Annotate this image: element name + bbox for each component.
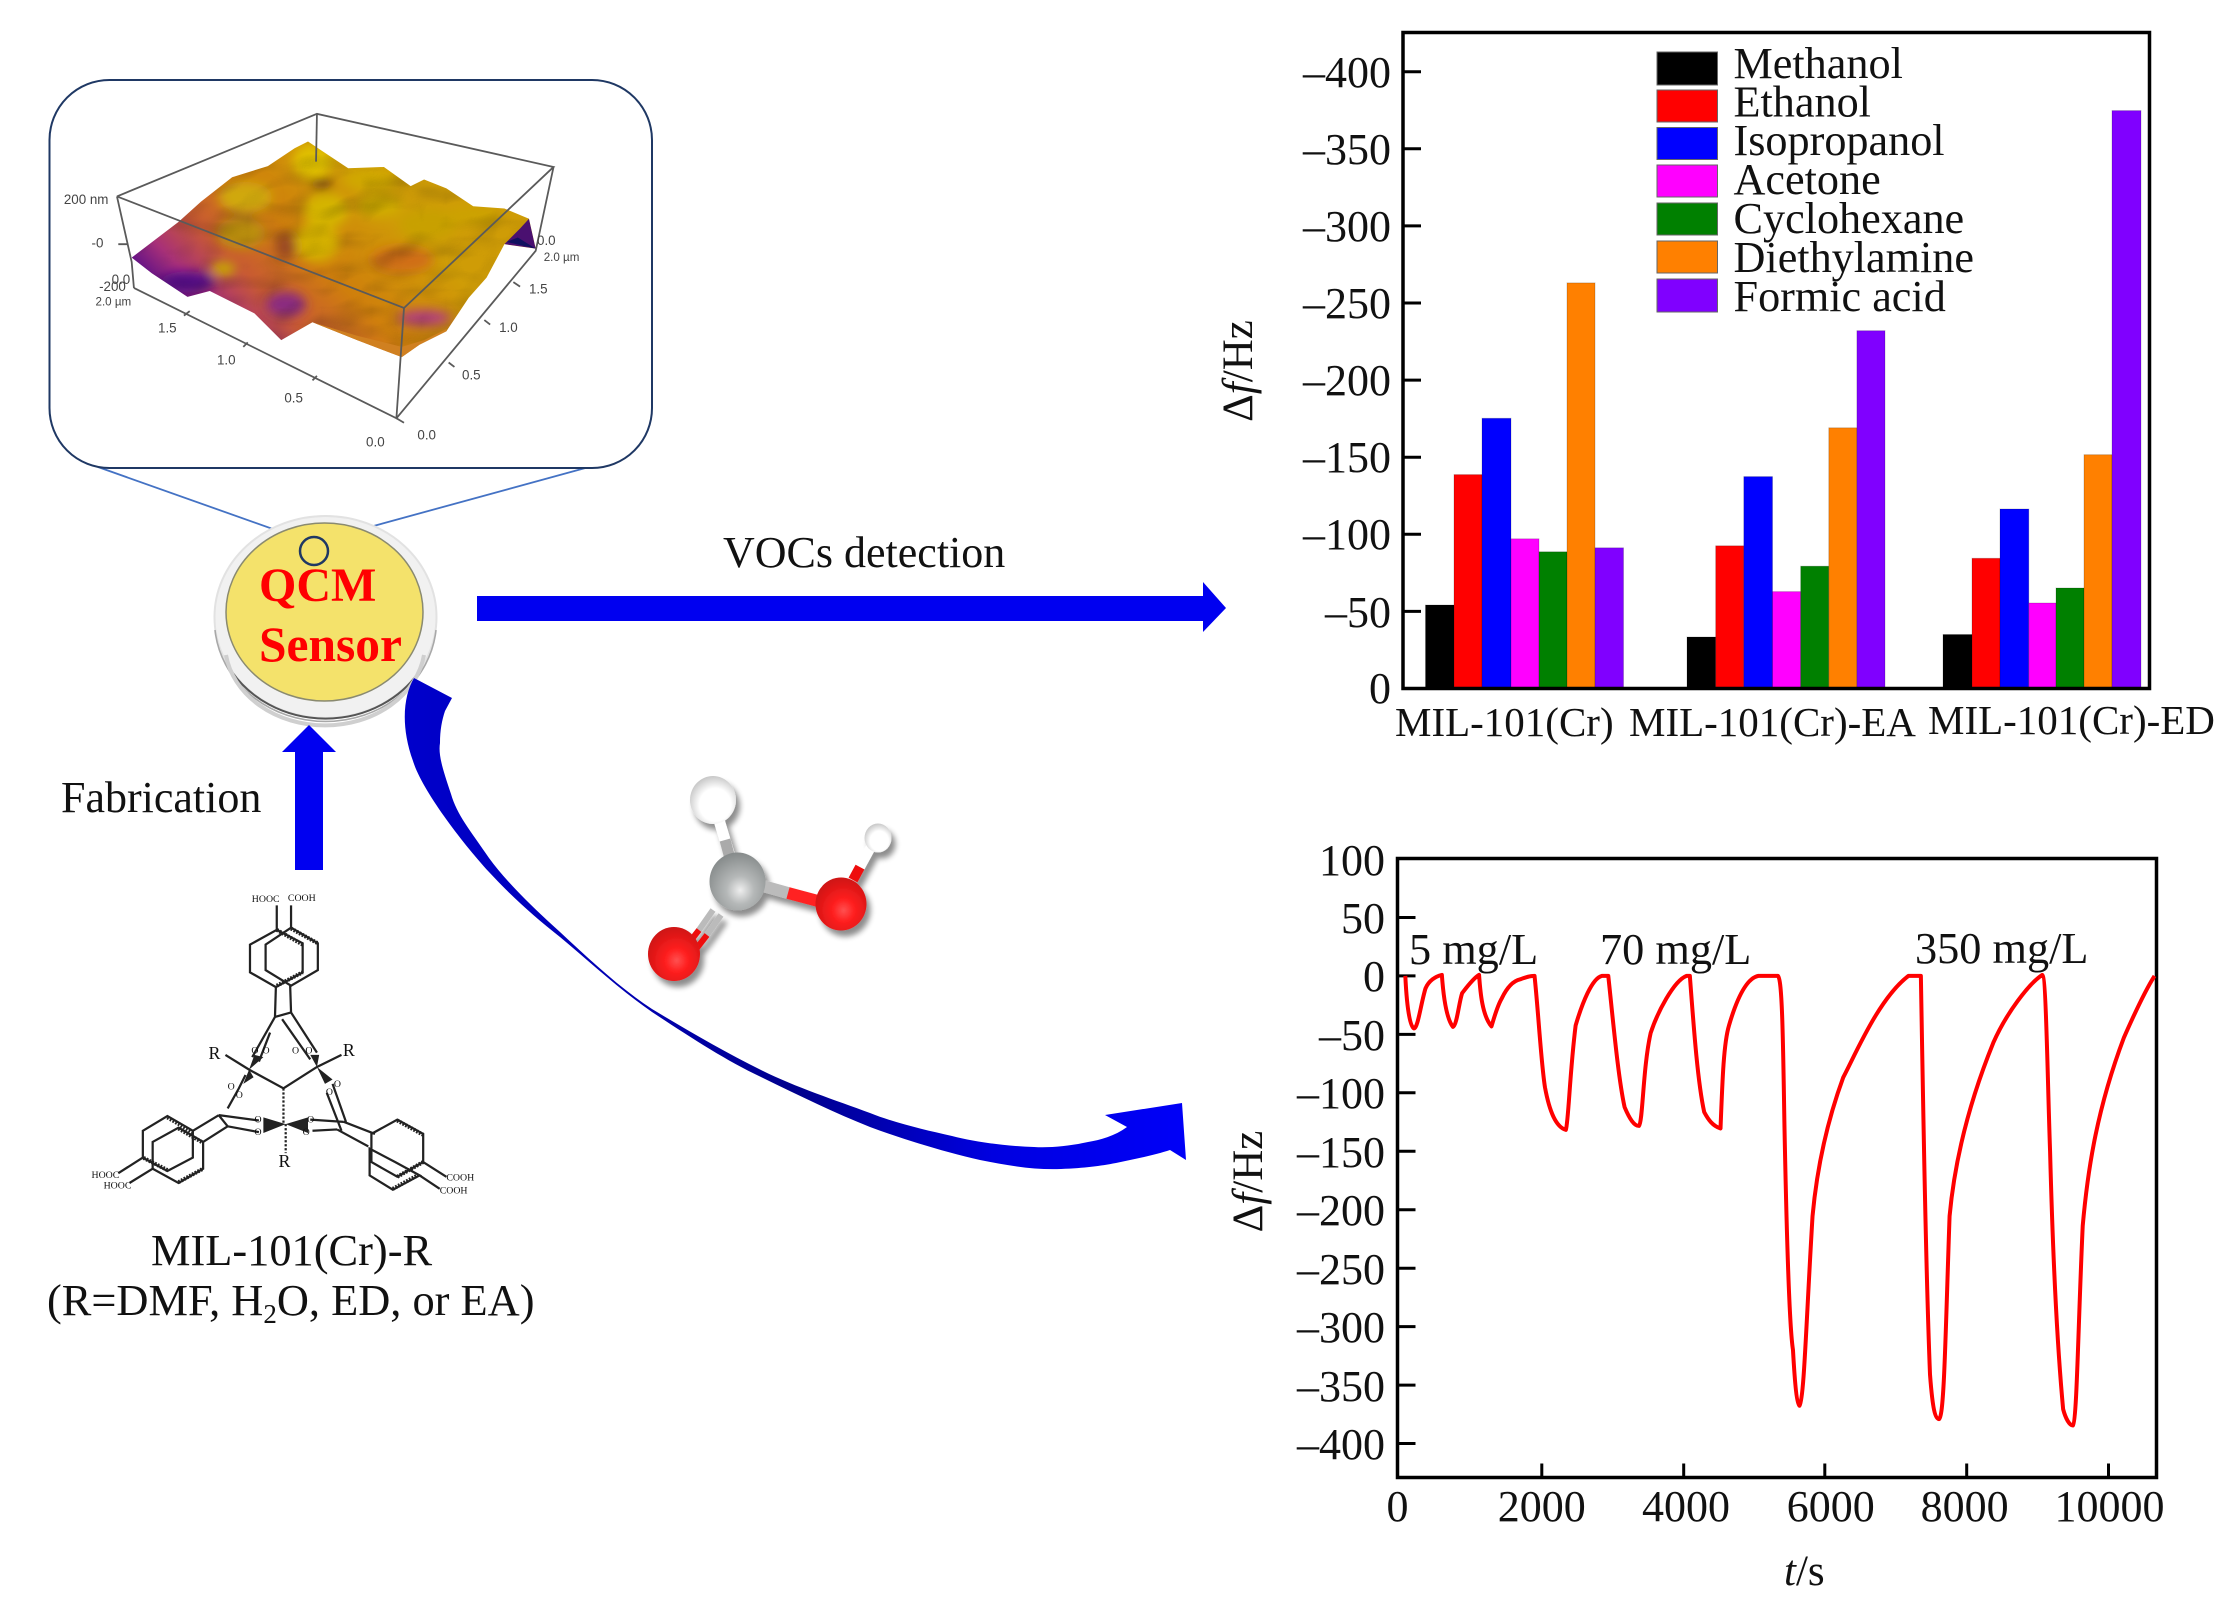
y axis tick labels: 100 xyxy=(1319,836,1385,885)
axis labels: -200 xyxy=(99,279,126,294)
x axis tick labels: 0 xyxy=(1386,1482,1408,1531)
arrow: VOCs detection xyxy=(477,582,1226,632)
x axis tick labels: 2000 xyxy=(1498,1482,1586,1531)
y axis tick labels: –50 xyxy=(1318,1011,1385,1060)
callout connector lines xyxy=(98,467,589,539)
chart: response curve over time xyxy=(1225,836,2164,1595)
AFM 3D surface plot xyxy=(64,114,579,449)
small oxygen and terminal labels: O xyxy=(292,1046,299,1057)
label: MIL-101(Cr)-R: (R=DMF, H xyxy=(47,1275,263,1325)
axis labels: -0 xyxy=(92,235,103,250)
y axis tick labels: –150 xyxy=(1296,1128,1385,1177)
panel: AFM surface callout xyxy=(50,80,652,539)
atom labels: R xyxy=(343,1040,355,1060)
axes frame and ticks xyxy=(1398,858,2156,1478)
legend: Diethylamine xyxy=(1734,233,1974,282)
response curve xyxy=(1405,975,2155,1426)
legend xyxy=(1657,39,1974,321)
atom labels: R xyxy=(279,1151,291,1171)
label: Fabrication: Fabrication xyxy=(61,773,261,822)
label: VOCs detection: VOCs detection xyxy=(723,528,1005,577)
legend: Cyclohexane xyxy=(1734,194,1964,243)
y axis title: Δf/Hz xyxy=(1215,320,1262,422)
molecule: formic acid xyxy=(648,776,892,981)
y axis tick labels: –50 xyxy=(1324,588,1391,637)
y axis tick labels: 0 xyxy=(1363,952,1385,1001)
axis labels: 0.0 xyxy=(417,428,436,443)
axis labels: 1.0 xyxy=(499,320,518,335)
sensor label: QCM xyxy=(259,559,376,612)
label: MIL-101(Cr)-R: MIL-101(Cr)-R xyxy=(151,1225,432,1275)
axis labels: 1.5 xyxy=(158,321,177,336)
label: MIL-101(Cr)-R: O, ED, or EA) xyxy=(277,1275,534,1325)
label: MIL-101(Cr)-R: 2 xyxy=(263,1299,277,1329)
y axis tick labels: –250 xyxy=(1296,1245,1385,1294)
axis labels: 1.0 xyxy=(217,353,236,368)
y axis tick labels: 0 xyxy=(1369,664,1391,713)
y axis tick labels: –400 xyxy=(1296,1420,1385,1469)
small oxygen and terminal labels: O xyxy=(326,1087,333,1098)
small oxygen and terminal labels: O xyxy=(254,1115,262,1126)
chemical structure: MIL-101(Cr)-R xyxy=(92,893,474,1197)
bars: MIL-101(Cr) xyxy=(1426,283,1624,688)
atom labels: R xyxy=(208,1043,220,1063)
small oxygen and terminal labels: O xyxy=(305,1046,312,1057)
box frame xyxy=(117,114,554,423)
x axis tick labels: 10000 xyxy=(2054,1482,2164,1531)
axes frame and ticks xyxy=(1403,32,2150,688)
QCM sensor disc xyxy=(214,516,436,725)
x axis labels xyxy=(1395,697,2215,745)
axis labels: 200 nm xyxy=(64,192,108,207)
x axis tick labels: 8000 xyxy=(1921,1482,2009,1531)
concentration labels: 5 mg/L xyxy=(1409,925,1538,974)
axis labels: 2.0 µm xyxy=(544,251,579,264)
y axis tick labels: –400 xyxy=(1302,48,1391,97)
small oxygen and terminal labels: HOOC xyxy=(104,1180,131,1191)
y axis tick labels: 50 xyxy=(1341,894,1385,943)
y axis tick labels: –200 xyxy=(1302,356,1391,405)
sensor label: Sensor xyxy=(259,617,402,672)
sensor label xyxy=(259,559,402,672)
y axis tick labels: –200 xyxy=(1296,1186,1385,1235)
small oxygen and terminal labels: O xyxy=(251,1046,258,1057)
small oxygen and terminal labels: O xyxy=(303,1127,310,1138)
x axis tick labels: 6000 xyxy=(1787,1482,1875,1531)
axis labels: 0.5 xyxy=(284,391,303,406)
small oxygen and terminal labels: O xyxy=(334,1079,341,1090)
bars: MIL-101(Cr)-ED xyxy=(1943,111,2141,689)
small oxygen and terminal labels: O xyxy=(254,1127,262,1138)
concentration labels: 350 mg/L xyxy=(1915,924,2088,973)
y axis tick labels xyxy=(1302,48,1391,713)
y axis tick labels: –350 xyxy=(1296,1362,1385,1411)
y axis tick labels: –250 xyxy=(1302,279,1391,328)
callout frame xyxy=(50,80,652,468)
bonds xyxy=(685,820,872,953)
x axis labels: MIL-101(Cr)-EA xyxy=(1629,699,1916,745)
small oxygen and terminal labels: O xyxy=(228,1081,235,1092)
zoom marker circle xyxy=(300,537,328,565)
small oxygen and terminal labels: O xyxy=(307,1115,314,1126)
small oxygen and terminal labels: HOOC xyxy=(92,1170,119,1181)
small oxygen and terminal labels xyxy=(92,893,474,1197)
small oxygen and terminal labels: O xyxy=(262,1046,270,1057)
small oxygen and terminal labels: COOH xyxy=(446,1172,474,1183)
y axis tick labels: –300 xyxy=(1296,1303,1385,1352)
legend: Isopropanol xyxy=(1734,116,1945,165)
legend: Acetone xyxy=(1734,155,1881,204)
y axis tick labels: –350 xyxy=(1302,125,1391,174)
axis labels: 1.5 xyxy=(529,282,548,297)
concentration labels: 70 mg/L xyxy=(1600,925,1751,974)
label: MIL-101(Cr)-R xyxy=(47,1225,534,1329)
small oxygen and terminal labels: HOOC xyxy=(252,894,280,905)
legend: Formic acid xyxy=(1734,272,1946,321)
y axis tick labels xyxy=(1296,836,1385,1469)
arrow: fabrication xyxy=(282,725,336,870)
concentration labels xyxy=(1409,924,2088,974)
x axis labels: MIL-101(Cr) xyxy=(1395,699,1614,745)
x axis tick labels xyxy=(1386,1482,2164,1531)
small oxygen and terminal labels: COOH xyxy=(440,1186,468,1197)
y axis title: Δf/Hz xyxy=(1225,1131,1272,1232)
x axis title: t/s xyxy=(1784,1548,1825,1595)
chart: frequency response by material xyxy=(1215,32,2215,745)
axis labels xyxy=(64,192,579,449)
x axis labels: MIL-101(Cr)-ED xyxy=(1928,697,2215,743)
y axis tick labels: –300 xyxy=(1302,202,1391,251)
y axis tick labels: –100 xyxy=(1296,1069,1385,1118)
x axis tick labels: 4000 xyxy=(1642,1482,1730,1531)
axis labels: 0.0 xyxy=(366,434,385,449)
curved arrow to response curve xyxy=(405,678,1186,1169)
axis labels: 0.0 xyxy=(112,272,130,287)
bars: MIL-101(Cr)-EA xyxy=(1687,331,1885,688)
legend: Ethanol xyxy=(1734,78,1871,126)
legend: Methanol xyxy=(1734,39,1903,88)
atoms xyxy=(690,776,736,824)
axis labels: 0.5 xyxy=(462,367,481,382)
small oxygen and terminal labels: COOH xyxy=(288,893,316,904)
y axis tick labels: –150 xyxy=(1302,433,1391,482)
small oxygen and terminal labels: O xyxy=(236,1090,243,1101)
axis labels: 0.0 xyxy=(537,233,556,248)
axis labels: 2.0 µm xyxy=(96,295,131,308)
atom labels xyxy=(208,1040,355,1171)
y axis tick labels: –100 xyxy=(1302,510,1391,559)
